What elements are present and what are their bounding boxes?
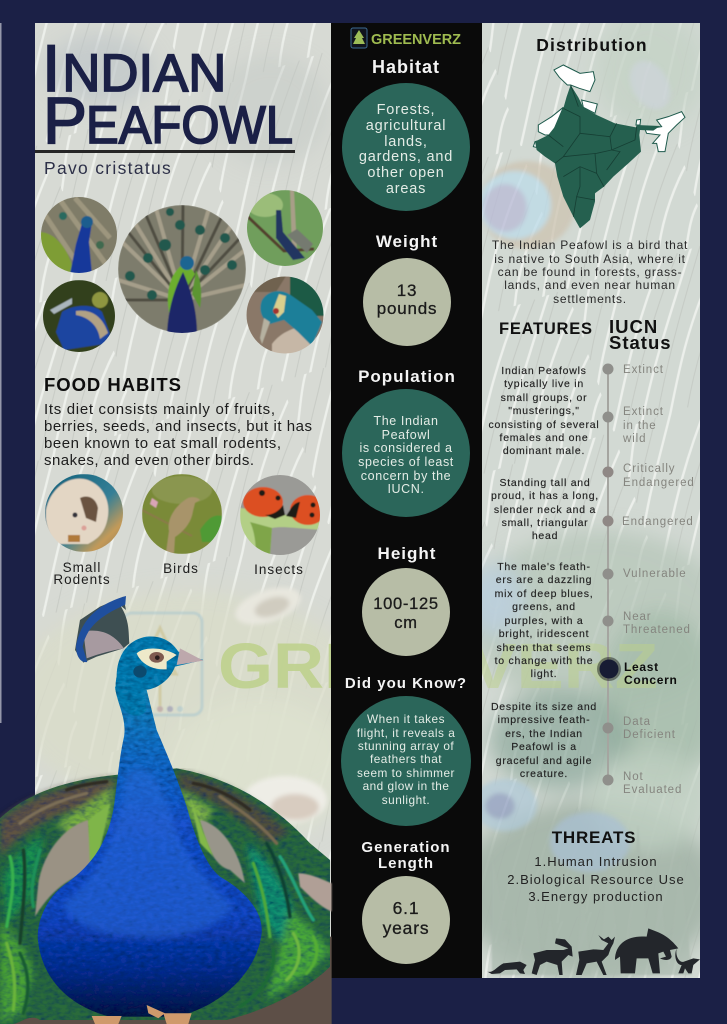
labels: food items: Insects [254,562,304,577]
section: habitat: other open [367,165,445,181]
feature: feathers: greens, and [512,601,576,613]
feather eye: right panel top [479,161,575,249]
section: generation length [361,839,451,964]
section: habitat: Habitat [372,57,440,77]
chart: IUCN status timeline: Critically [623,463,675,475]
watermark wordmark right: GREENVERZ [218,630,658,702]
feather eye: left panel upper [236,586,300,625]
title: Indian Peafowl: INDIAN [42,31,226,105]
heading: features: FEATURES [499,320,592,338]
crest [75,597,129,663]
section: generation length: Generation [361,839,451,856]
feature: groups: typically live in [504,378,584,390]
chart: IUCN status timeline: Not [623,771,644,783]
feature: groups: females and one [500,432,588,444]
section: habitat: gardens, and [359,149,453,165]
panel: black centre column [331,23,482,978]
feature: groups: small groups, or [501,392,587,404]
labels: food items: Small [63,560,101,575]
chart: IUCN status timeline: Endangered [622,516,694,528]
section: habitat [342,57,470,211]
feature: feathers: ers are a dazzling [496,574,592,586]
section: height: cm [394,614,418,632]
feature: feathers: bright, iridescent [499,628,589,640]
chart: IUCN status timeline: Evaluated [623,784,682,796]
feature: build [491,477,599,542]
labels: food items [53,560,304,587]
feature: groups [489,365,599,457]
feature: groups: consisting of several [489,419,599,431]
tail strands [7,782,317,1013]
title: Indian Peafowl: PEAFOWL [43,83,293,157]
feature: agility: creature. [520,768,568,780]
section: population: concern by the [361,469,451,483]
feature: agility: graceful and agile [496,755,592,767]
section: habitat: agricultural [366,118,446,134]
photo: peacock head close up [246,276,326,356]
text: distribution paragraph: settlements. [553,292,627,306]
subtitle: Pavo cristatus [44,158,172,178]
floor [0,937,332,1024]
text: food habits paragraph: snakes, and even other birds. [44,452,254,469]
pink ground patch [298,873,332,912]
section: did you know: seem to shimmer [357,766,455,780]
feature: build: small, triangular [502,517,588,529]
text: threats list [507,854,685,904]
feature: agility: Despite its size and [491,701,597,713]
feature: agility: Peafowl is a [511,741,577,753]
icon: small rodent photo [44,474,124,552]
section: population: The Indian [373,414,439,428]
feature: build: slender neck and a [494,504,596,516]
text: threats list: 2.Biological Resource Use [507,872,685,887]
section: population [342,367,470,517]
heading: distribution: Distribution [536,35,648,55]
chart: IUCN status timeline: Data [623,716,651,728]
feature: feathers: to change with the [495,655,593,667]
photo: peacock neck with tail [40,196,118,274]
section: generation length: Length [378,855,434,872]
head [116,636,203,716]
feather eye: left panel lower [243,776,327,824]
section: population: species of least [358,455,454,469]
section: weight: 13 [397,281,417,300]
section: weight: pounds [377,299,437,318]
section: population: Population [358,367,456,386]
section: did you know: stunning array of [358,739,454,753]
chart: IUCN status timeline [597,364,695,796]
section: population: IUCN. [387,482,425,496]
feature: groups: "musterings," [508,405,580,417]
tail feathers [0,768,330,1024]
text: food habits paragraph: been known to eat small rodents, [44,435,281,452]
feature: groups: Indian Peafowls [501,365,587,377]
watermark wordmark left: GREENVERZ [218,630,658,702]
heading: food habits: FOOD HABITS [44,374,181,395]
logo: Greenverz: GREENVERZ [371,31,461,48]
heading: threats: THREATS [552,828,636,847]
section: weight: Weight [376,232,438,251]
heading: IUCN status: IUCN [609,316,658,337]
map: India distribution [533,65,685,228]
forest silhouette [492,825,692,975]
text: threats list: 3.Energy production [528,889,664,904]
panel: right feather background [482,23,700,978]
wing speckled left [35,820,92,917]
section: population: Peafowl [382,428,430,442]
chart: IUCN status timeline: Least [624,660,659,674]
section: did you know: sunlight. [382,793,430,807]
feather eye: right panel middle [482,560,528,638]
wing speckled right [200,820,245,883]
section: generation length: 6.1 [393,898,419,918]
body [38,687,262,1017]
title: Indian Peafowl [42,31,293,157]
section: height: 100-125 [373,595,439,613]
icon: ladybugs photo [240,474,326,556]
feature: feathers: The male's feath- [497,561,591,573]
feature: agility: ers, the Indian [505,728,583,740]
text: distribution paragraph: is native to South Asia, where it [494,252,686,266]
labels: food items: Rodents [53,572,111,587]
text: food habits paragraph: berries, seeds, and insects, but it has [44,418,312,435]
chart: IUCN status timeline: Threatened [623,624,691,636]
feature: groups: dominant male. [503,445,585,457]
text: distribution paragraph: can be found in forests, grass- [498,265,682,279]
feather eye: right panel lower [473,779,630,872]
animal: elephant [615,928,678,973]
icon: bird photo [142,474,222,554]
section: population: is considered a [359,441,453,455]
text: distribution paragraph [492,238,688,306]
section: did you know [341,675,471,826]
text: food habits paragraph [44,401,312,469]
section: weight [363,232,451,346]
photo: peacock in tree [246,190,324,268]
section: habitat: lands, [384,134,428,150]
section: did you know: flight, it reveals a [357,726,455,740]
chart: IUCN status timeline: wild [622,433,646,445]
chart: IUCN status timeline: Concern [624,673,678,687]
feature: feathers: light. [531,668,557,680]
chart: IUCN status timeline: Extinct [623,406,664,418]
feature: feathers [495,561,593,680]
chart: IUCN status timeline: in the [623,420,657,432]
chart: IUCN status timeline: Vulnerable [623,568,687,580]
feature: agility: impressive feath- [498,714,590,726]
text: food habits paragraph: Its diet consists mainly of fruits, [44,401,275,418]
feature: build: head [532,530,558,542]
watermark logo [123,613,202,715]
animal: leopard [487,962,527,974]
chart: IUCN status timeline: Extinct [623,364,664,376]
section: did you know: feathers that [370,752,442,766]
feature: feathers: purples, with a [505,615,583,627]
section: habitat: areas [386,181,426,197]
feature: build: Standing tall and [500,477,590,489]
status marker: least concern [597,657,621,681]
illustration: peacock [0,596,332,1024]
section: did you know: When it takes [367,712,445,726]
text: distribution paragraph: lands, and even near human [504,278,676,292]
chart: IUCN status timeline: Endangered [623,477,695,489]
animal: ibex [532,938,573,975]
feature: build: proud, it has a long, [491,490,599,502]
labels: food items: Birds [163,561,199,576]
section: did you know: Did you Know? [345,675,467,692]
chart: IUCN status timeline: Deficient [623,729,676,741]
text: distribution paragraph: The Indian Peafowl is a bird that [492,238,688,252]
illustration: endangered animals [487,928,700,975]
title rule [35,150,295,153]
photo: peacock in dark foliage [42,280,116,354]
logo: Greenverz [351,28,461,48]
section: did you know: and glow in the [363,779,449,793]
section: generation length: years [383,918,429,938]
text: threats list: 1.Human Intrusion [534,854,658,869]
section: habitat: Forests, [377,102,435,118]
heading: IUCN status [609,316,672,353]
feature: feathers: mix of deep blues, [495,588,593,600]
text: features list [489,365,599,780]
animal: monkey [675,948,700,973]
section: height [362,544,450,656]
feature: feathers: sheen that seems [497,642,591,654]
legs [92,1005,192,1024]
section: height: Height [378,544,436,563]
chart: IUCN status timeline: Near [623,611,652,623]
feature: agility [491,701,597,780]
photo: peacock displaying fan [118,205,246,334]
animal: deer [576,935,615,975]
heading: IUCN status: Status [609,332,672,353]
